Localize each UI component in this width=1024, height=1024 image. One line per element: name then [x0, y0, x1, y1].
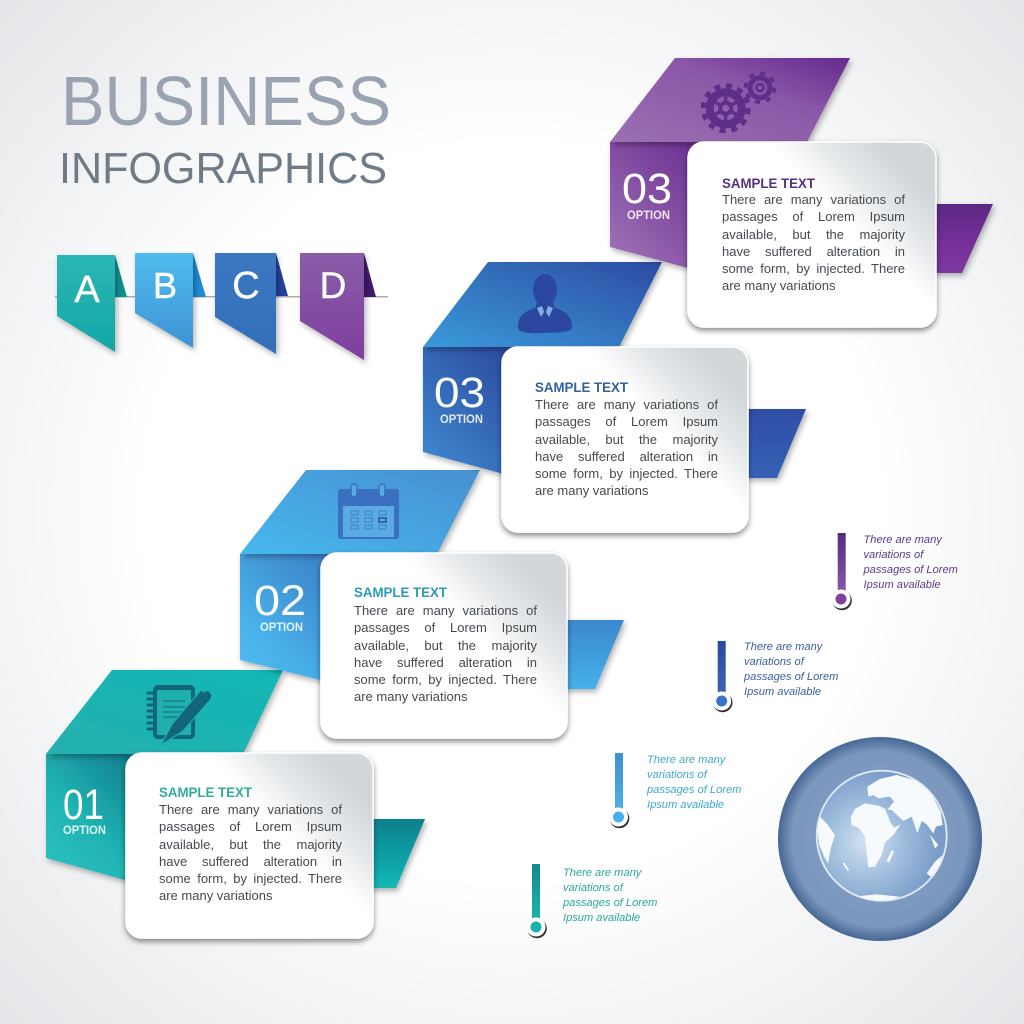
icon: notebook and pen: [148, 685, 212, 745]
tab A: [57, 255, 127, 352]
card 03 blue: are many variations: [535, 483, 648, 498]
number 01: 01: [63, 781, 104, 829]
icon: gears: [703, 73, 774, 131]
top fold 03 purple: [610, 58, 850, 142]
callout: purple: variations of: [864, 549, 925, 561]
callout: purple: Ipsum available: [864, 579, 941, 591]
card 02: There are many variations of: [354, 603, 537, 618]
number 02: 02: [254, 577, 306, 625]
card 02: [321, 553, 567, 738]
tab C: [215, 253, 288, 354]
card 03 blue: SAMPLE TEXT: [535, 380, 629, 395]
callout: dark blue: variations of: [744, 656, 806, 668]
right tab 02: [555, 620, 624, 689]
callout: dark blue: Ipsum available: [744, 686, 821, 698]
tab B: B: [153, 265, 177, 306]
number 03 purple: 03: [622, 165, 672, 213]
callout: purple: [832, 533, 958, 610]
number 01: OPTION: [63, 825, 106, 837]
panel: option 02: [240, 470, 624, 738]
callout: dark blue: [712, 641, 838, 712]
card 01: SAMPLE TEXT: [159, 785, 253, 800]
top fold 03 blue: [423, 262, 662, 347]
tab C: C: [232, 265, 260, 307]
right tab 01: [360, 819, 425, 888]
icon: calendar: [338, 484, 399, 539]
number 03 blue: OPTION: [440, 414, 483, 426]
card 03 blue: passages of Lorem Ipsum: [535, 414, 718, 429]
card 03 purple: [688, 142, 936, 327]
card 03 purple: some form, by injected. There: [722, 261, 905, 276]
callout: purple: passages of Lorem: [862, 564, 958, 576]
right tab 03 blue: [735, 409, 806, 478]
card 01: have suffered alteration in: [159, 854, 342, 869]
right tab 03 purple: [922, 204, 993, 273]
card 03 blue: have suffered alteration in: [535, 449, 718, 464]
card 03 purple: have suffered alteration in: [722, 244, 905, 259]
title: [59, 62, 391, 193]
callout: light blue: passages of Lorem: [646, 784, 741, 796]
callout: dark blue: There are many: [744, 641, 824, 653]
card 03 purple: There are many variations of: [722, 192, 905, 207]
callout: purple: There are many: [864, 534, 943, 546]
card 03 blue: There are many variations of: [535, 397, 718, 412]
letter tabs A B C D: [55, 253, 388, 360]
card 03 purple: passages of Lorem Ipsum: [722, 209, 905, 224]
callout: light blue: There are many: [647, 754, 727, 766]
top fold 02: [240, 470, 480, 554]
globe: [778, 737, 982, 941]
tab B: [135, 253, 206, 348]
callout: teal: Ipsum available: [563, 912, 640, 924]
card 01: There are many variations of: [159, 802, 342, 817]
card 03 blue: some form, by injected. There: [535, 466, 718, 481]
card 02: SAMPLE TEXT: [354, 585, 448, 600]
panel: option 03 blue: [423, 262, 806, 532]
callout: teal: There are many: [563, 867, 643, 879]
card 03 blue: available, but the majority: [535, 432, 718, 447]
heading: business: BUSINESS: [61, 62, 391, 140]
card 01: available, but the majority: [159, 837, 342, 852]
icon: businessman: [518, 274, 572, 333]
card 03 purple: are many variations: [722, 278, 835, 293]
number 03 purple: OPTION: [627, 210, 670, 222]
card 01: are many variations: [159, 888, 272, 903]
heading: infographics: INFOGRAPHICS: [59, 144, 387, 193]
card 01: some form, by injected. There: [159, 871, 342, 886]
card 02: some form, by injected. There: [354, 672, 537, 687]
top fold 01: [46, 670, 283, 754]
card 02: are many variations: [354, 689, 467, 704]
callout: light blue: variations of: [647, 769, 709, 781]
panel: option 03 purple: [610, 58, 993, 327]
card 01: passages of Lorem Ipsum: [159, 819, 342, 834]
card 03 purple: available, but the majority: [722, 227, 905, 242]
panel: option 01: [46, 670, 425, 938]
callout: teal: [526, 864, 657, 938]
card 01: [126, 753, 373, 938]
tab D: [300, 253, 376, 360]
callout: teal: variations of: [563, 882, 625, 894]
callout: light blue: [609, 753, 741, 828]
card 03 purple: SAMPLE TEXT: [722, 176, 816, 191]
callout: teal: passages of Lorem: [562, 897, 657, 909]
card 02: passages of Lorem Ipsum: [354, 620, 537, 635]
callout: light blue: Ipsum available: [647, 799, 724, 811]
callout: dark blue: passages of Lorem: [743, 671, 838, 683]
number 02: OPTION: [260, 622, 303, 634]
card 02: have suffered alteration in: [354, 655, 537, 670]
number 03 blue: 03: [434, 369, 485, 417]
tab A: A: [74, 269, 100, 311]
card 03 blue: [502, 347, 748, 532]
card 02: available, but the majority: [354, 638, 537, 653]
tab D: D: [320, 265, 346, 306]
